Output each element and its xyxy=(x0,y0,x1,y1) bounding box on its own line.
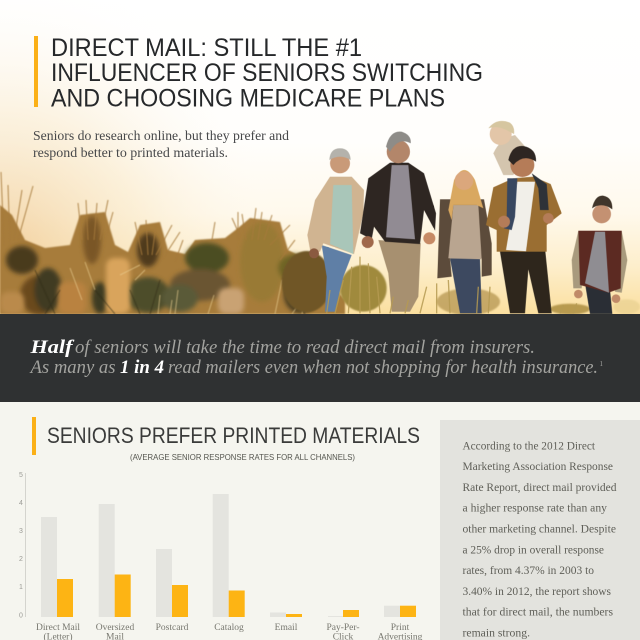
statement text: 1 xyxy=(600,360,604,368)
title text: AND CHOOSING MEDICARE PLANS xyxy=(51,84,445,112)
sidebar text: a 25% drop in overall response xyxy=(462,542,604,556)
y axis: 4 xyxy=(19,500,23,507)
sidebar text: remain strong. xyxy=(462,626,530,640)
y axis: 3 xyxy=(19,528,23,535)
category labels: Email xyxy=(275,623,298,633)
statement text: read mailers even when not shopping for health insurance. xyxy=(168,357,598,378)
bar chart: response rates by channel xyxy=(19,472,423,640)
sidebar text: a higher response rate than any xyxy=(462,501,607,515)
grass field xyxy=(0,172,345,315)
sidebar text: that for direct mail, the numbers xyxy=(462,605,613,619)
mother xyxy=(437,170,492,313)
statement text: 1 in 4 xyxy=(120,357,164,378)
catalog bars xyxy=(213,494,245,617)
title text: INFLUENCER OF SENIORS SWITCHING xyxy=(51,59,483,87)
oversized mail bars xyxy=(99,504,131,617)
heading accent bar xyxy=(32,417,36,455)
statement text: As many as xyxy=(29,357,115,378)
statement text xyxy=(29,337,604,378)
category labels: Direct Mail xyxy=(36,623,80,633)
category labels: Pay-Per- xyxy=(326,623,360,633)
sidebar text xyxy=(462,438,616,640)
y axis: 5 xyxy=(19,472,23,479)
sidebar text: other marketing channel. Despite xyxy=(462,522,616,536)
sidebar text: 3.40% in 2012, the report shows xyxy=(462,584,611,598)
print advertising bars xyxy=(384,606,416,617)
sidebar text: According to the 2012 Direct xyxy=(462,438,596,452)
postcard bars xyxy=(156,549,188,617)
photo: family walking through sunlit grass xyxy=(0,0,640,315)
y axis xyxy=(19,472,26,620)
grandmother xyxy=(307,148,364,312)
section heading xyxy=(32,417,420,462)
intro text xyxy=(33,129,289,161)
category labels: Catalog xyxy=(214,623,244,633)
grandfather xyxy=(360,132,436,312)
sidebar text: Marketing Association Response xyxy=(462,459,613,473)
y axis: 0 xyxy=(19,612,23,620)
lower section background xyxy=(0,402,640,640)
title accent bar xyxy=(34,36,38,107)
title block xyxy=(34,34,483,112)
y axis: 2 xyxy=(19,556,23,563)
y axis: 1 xyxy=(19,584,23,591)
dark band with key statement xyxy=(0,314,640,402)
category labels xyxy=(36,623,423,640)
title text xyxy=(51,34,483,112)
statement text: Half xyxy=(29,337,74,358)
category labels: Postcard xyxy=(156,623,189,633)
direct mail bars xyxy=(41,517,73,617)
sidebar text: Rate Report, direct mail provided xyxy=(462,480,616,494)
family figures xyxy=(282,121,640,315)
title text: DIRECT MAIL: STILL THE #1 xyxy=(51,34,362,62)
sidebar text: rates, from 4.37% in 2003 to xyxy=(462,563,594,577)
boy xyxy=(572,196,627,314)
father carrying child xyxy=(486,121,562,313)
email bars xyxy=(270,612,302,617)
category labels: Oversized xyxy=(96,623,135,633)
foreground grass over legs xyxy=(327,257,577,313)
heading text: SENIORS PREFER PRINTED MATERIALS xyxy=(47,423,420,448)
statement text: of seniors will take the time to read direct mail from insurers. xyxy=(75,337,535,358)
intro text: Seniors do research online, but they prefer and xyxy=(33,129,289,144)
category labels: Print xyxy=(391,623,410,633)
pay-per-click bars xyxy=(328,610,359,617)
chart subtitle: (AVERAGE SENIOR RESPONSE RATES FOR ALL CHANNELS) xyxy=(130,452,355,462)
panel: direct marketing report sidebar xyxy=(440,420,640,640)
intro text: respond better to printed materials. xyxy=(33,146,228,161)
